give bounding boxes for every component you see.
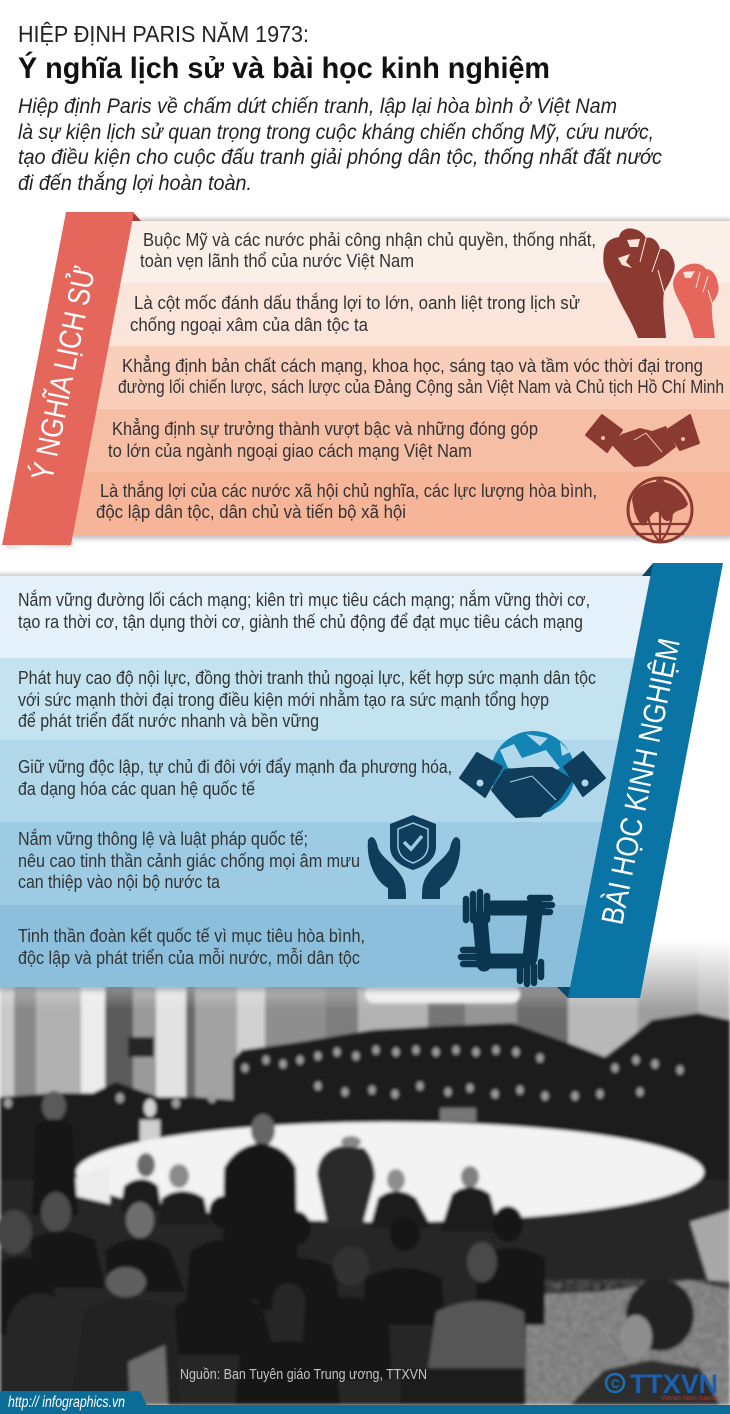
intro text: Hiệp định Paris về chấm dứt chiến tranh, lập lại hòa bình ở Việt Nam: [18, 94, 617, 118]
lesson text 3: Giữ vững độc lập, tự chủ đi đôi với đẩy mạnh đa phương hóa,: [18, 757, 452, 777]
crowd faces: [4, 1046, 684, 1117]
title: Ý nghĩa lịch sử và bài học kinh nghiệm: [18, 51, 550, 85]
significance text 1: [140, 230, 596, 271]
ribbon folds: [557, 563, 653, 998]
seated at table: [120, 1153, 500, 1232]
icon: globe handshake: [460, 731, 605, 817]
band 3: [0, 740, 618, 822]
band 2: [0, 658, 634, 740]
panel: historic significance: [2, 212, 730, 549]
icon: large fist: [603, 228, 675, 338]
intro text: là sự kiện lịch sử quan trọng trong cuộc kháng chiến chống Mỹ, cứu nước,: [18, 120, 654, 144]
lesson text 5: độc lập và phát triển của mỗi nước, mỗi dân tộc: [18, 947, 360, 968]
icon: handshake: [586, 415, 699, 467]
lesson text 5: Tinh thần đoàn kết quốc tế vì mục tiêu hòa bình,: [18, 926, 365, 946]
audience: [0, 1192, 545, 1405]
rear chairs: [400, 1368, 522, 1405]
chandelier: [365, 985, 520, 1003]
back crowd: [0, 1013, 730, 1190]
intro text: [18, 94, 662, 195]
lesson text 4: Nắm vững thông lệ và luật pháp quốc tế;: [18, 828, 308, 849]
intro text: tạo điều kiện cho cuộc đấu tranh giải phóng dân tộc, thống nhất đất nước: [18, 145, 662, 169]
ribbon fold: [131, 212, 141, 221]
significance text 3: [118, 355, 724, 397]
lesson text 2: với sức mạnh thời đại trong điều kiện mới nhằm tạo ra sức mạnh tổng hợp: [18, 689, 549, 710]
icon: four linked hands: [461, 892, 552, 984]
logo: TTXVN: Vietnam News Agency: [661, 1396, 717, 1402]
significance text 1: toàn vẹn lãnh thổ của nước Việt Nam: [140, 251, 414, 271]
significance text 4: [108, 418, 538, 461]
fade to white above the photo: [0, 940, 730, 1010]
ribbon shadow: [4, 540, 72, 549]
ribbon label: Ý NGHĨA LỊCH SỬ: [24, 263, 102, 483]
band 5: [0, 905, 586, 987]
website tag: http:// infographics.vn: [8, 1394, 125, 1411]
logo: TTXVN: TTXVN: [630, 1369, 718, 1399]
carpet: [526, 1280, 730, 1405]
logo: TTXVN: C: [611, 1377, 620, 1391]
intro text: đi đến thắng lợi hoàn toàn.: [18, 170, 252, 195]
right-side chair: [690, 1210, 730, 1282]
significance text 5: độc lập dân tộc, dân chủ và tiến bộ xã hội: [96, 502, 406, 522]
icon: small fist: [673, 264, 719, 338]
band 5: [72, 472, 730, 535]
significance text 3: Khẳng định bản chất cách mạng, khoa học, sáng tạo và tầm vóc thời đại trong: [122, 355, 703, 376]
ribbon: [568, 563, 723, 998]
wall with pilasters: [0, 946, 730, 1102]
band 1: [0, 576, 650, 658]
title: HIỆP ĐỊNH PARIS NĂM 1973:: [18, 21, 309, 47]
band 1: [120, 221, 730, 283]
left standing man: [32, 1091, 78, 1215]
lesson text 1: Nắm vững đường lối cách mạng; kiên trì mục tiêu cách mạng; nắm vững thời cơ,: [18, 589, 590, 610]
standing man: [222, 1114, 298, 1290]
significance text 2: Là cột mốc đánh dấu thắng lợi to lớn, oanh liệt trong lịch sử: [134, 292, 580, 313]
lesson text 2: để phát triển đất nước nhanh và bền vững: [18, 711, 319, 731]
camera: [128, 1037, 154, 1057]
significance text 5: [96, 480, 597, 522]
ribbon: [2, 212, 134, 545]
lesson text 4: can thiệp vào nội bộ nước ta: [18, 872, 221, 892]
significance text 4: to lớn của ngành ngoại giao cách mạng Việt Nam: [108, 441, 472, 461]
significance text 5: Là thắng lợi của các nước xã hội chủ nghĩa, các lực lượng hòa bình,: [100, 480, 597, 501]
photo: signing conference hall: [0, 940, 730, 1405]
lesson text 3: [18, 757, 452, 799]
photographer: [570, 1279, 720, 1405]
icon: world globe: [628, 478, 692, 542]
significance text 2: [130, 292, 580, 335]
band 4: [84, 409, 730, 472]
lesson text 2: [18, 668, 596, 731]
significance text 4: Khẳng định sự trưởng thành vượt bậc và những đóng góp: [112, 418, 538, 439]
title: [18, 21, 550, 85]
source note: Nguồn: Ban Tuyên giáo Trung ương, TTXVN: [180, 1366, 427, 1383]
ribbon label: BÀI HỌC KINH NGHIỆM: [595, 635, 687, 927]
lesson text 1: [18, 589, 590, 632]
lesson text 5: [18, 926, 365, 968]
bending man: [317, 1136, 375, 1228]
significance text 2: chống ngoại xâm của dân tộc ta: [130, 315, 369, 335]
icon: shield in hands: [368, 815, 460, 899]
light shirts: [440, 1108, 476, 1122]
band 4: [0, 822, 602, 905]
lesson text 4: nêu cao tinh thần cảnh giác chống mọi âm mưu: [18, 851, 360, 871]
footer bar: [0, 1405, 730, 1414]
table apron and floor: [0, 1180, 730, 1405]
band 2: [108, 283, 730, 346]
panel: lessons learned: [0, 563, 723, 998]
band 3: [96, 346, 730, 409]
table: [76, 1122, 704, 1222]
lesson text 3: đa dạng hóa các quan hệ quốc tế: [18, 779, 255, 799]
lesson text 1: tạo ra thời cơ, tận dụng thời cơ, giành thế chủ động để đạt mục tiêu cách mạng: [18, 612, 583, 632]
significance text 1: Buộc Mỹ và các nước phải công nhận chủ quyền, thống nhất,: [143, 230, 596, 250]
lesson text 4: [18, 828, 360, 892]
lesson text 2: Phát huy cao độ nội lực, đồng thời tranh thủ ngoại lực, kết hợp sức mạnh dân tộc: [18, 668, 596, 688]
